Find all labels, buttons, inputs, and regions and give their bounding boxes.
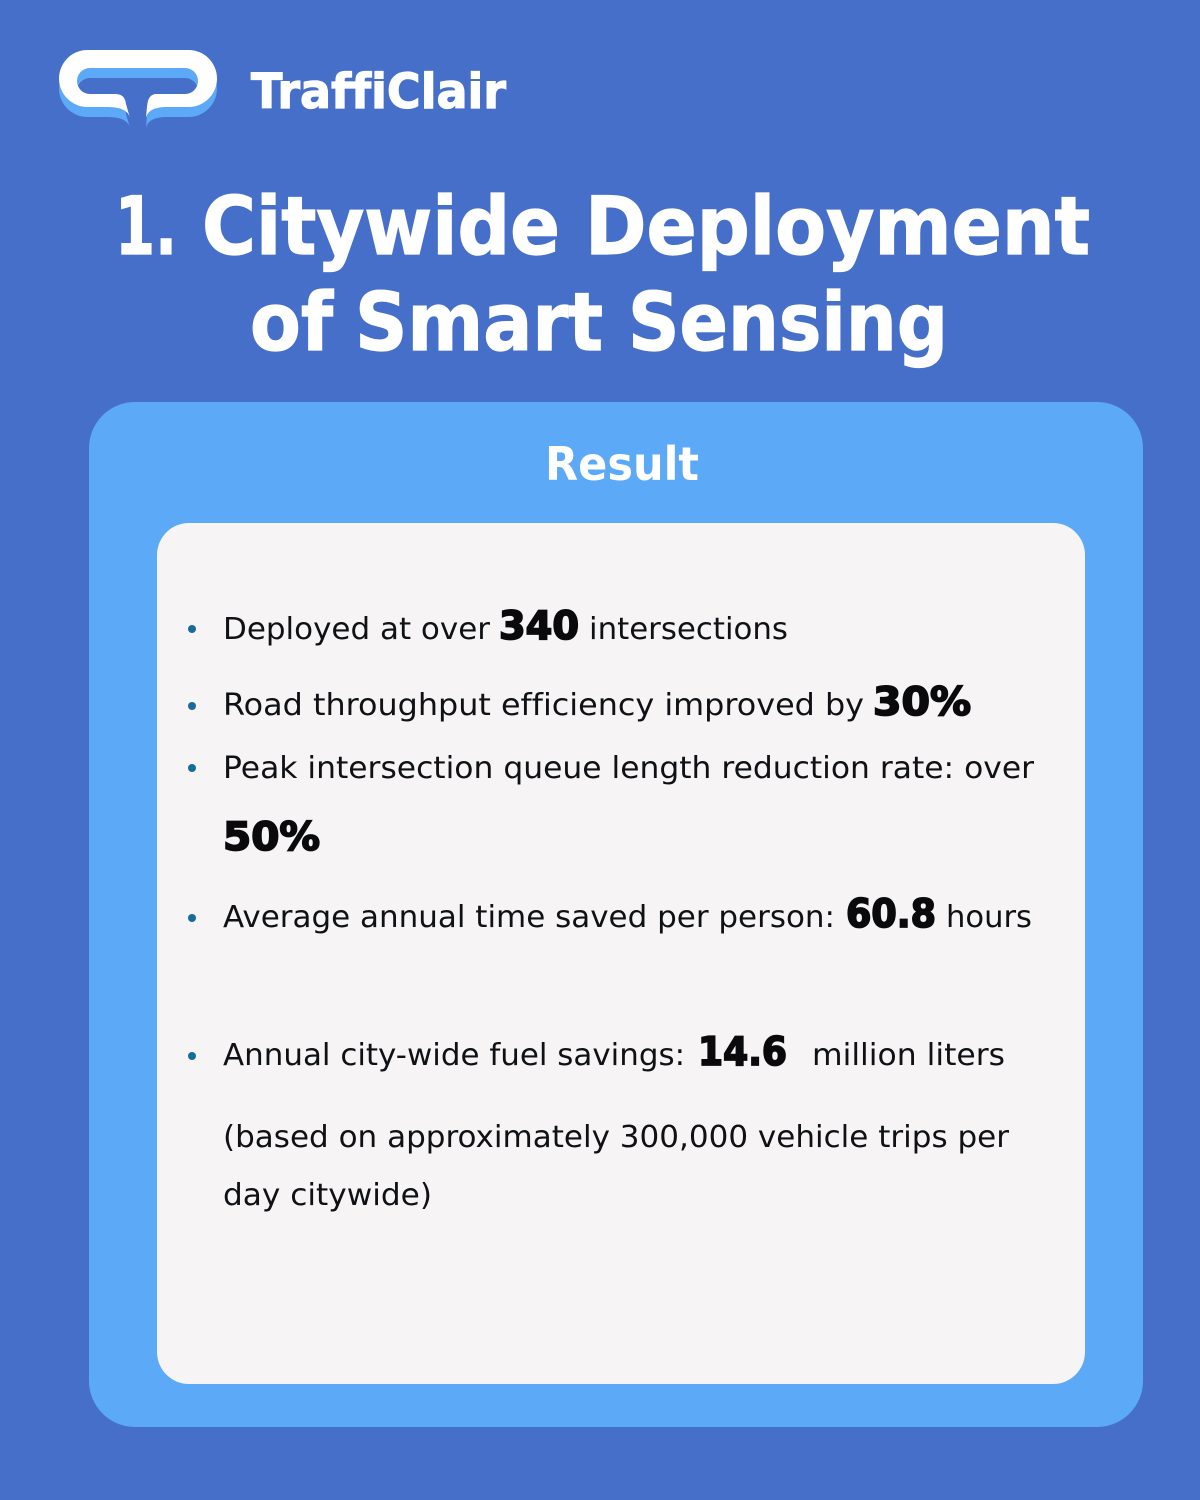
title line 1: Citywide (202, 180, 560, 273)
bullet: intersections: 340 (499, 604, 579, 649)
bullet: time saved: Average annual time saved per person: (223, 900, 835, 935)
bullet: throughput: Road throughput efficiency improved by (223, 688, 864, 723)
card background (157, 523, 1085, 1384)
bullet: intersections: intersections (589, 612, 788, 647)
panel: result (89, 402, 1143, 1427)
bullet: fuel savings: Annual city-wide fuel savings: (223, 1038, 685, 1073)
header: logo and brand (59, 50, 506, 128)
bullet: queue length (188, 751, 1035, 860)
title line 1: 1. (115, 180, 177, 273)
brand name: TraffiClair (251, 64, 506, 120)
bullet: fuel savings (188, 1030, 1010, 1213)
bullet: fuel savings: (based on approximately 300,000 vehicle trips per (223, 1120, 1010, 1155)
panel heading: Result (545, 437, 699, 491)
bullet: time saved: hours (946, 900, 1032, 935)
title line 2 (250, 276, 948, 369)
bullet: throughput (188, 680, 971, 725)
title line 2: Smart (355, 276, 603, 369)
title line 2: of (250, 276, 334, 369)
bullet: fuel savings: day citywide) (223, 1178, 432, 1213)
title line 1: Deployment (585, 180, 1090, 273)
bullet: time saved (188, 892, 1032, 937)
panel background (89, 402, 1143, 1427)
bullet: throughput: 30% (873, 680, 971, 725)
title (115, 180, 1090, 369)
bullet: time saved: 60.8 (846, 892, 936, 937)
title line 1 (115, 180, 1090, 273)
results card (157, 523, 1085, 1384)
bullet: queue length: Peak intersection queue length reduction rate: over (223, 751, 1035, 786)
icon: TraffiClair logo (59, 50, 217, 128)
bullet: fuel savings: million liters (812, 1038, 1005, 1073)
title line 2: Sensing (628, 276, 948, 369)
bullet: intersections (188, 604, 788, 649)
bullet: fuel savings: 14.6 (698, 1030, 787, 1075)
bullet: intersections: Deployed at over (223, 612, 491, 647)
bullet: queue length: 50% (223, 815, 320, 860)
